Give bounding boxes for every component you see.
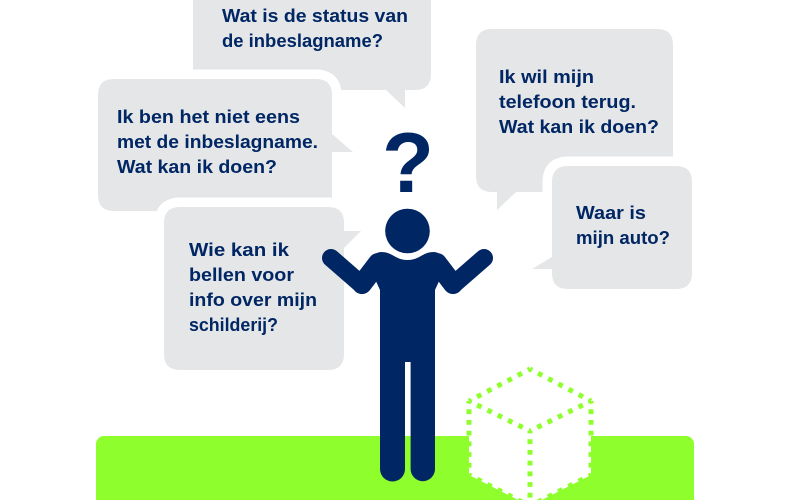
speech bubble: phone back [476, 29, 673, 210]
shoulders [362, 263, 453, 284]
speech bubble: status of the seizure [193, 0, 431, 108]
speech bubble: who to call about painting: bellen voor [189, 264, 294, 285]
speech bubble: who to call about painting [164, 207, 361, 370]
speech bubble: disagree with the seizure: Ik ben het niet eens [117, 106, 300, 127]
speech bubble: who to call about painting: info over mijn [189, 289, 317, 310]
arms [331, 258, 484, 285]
speech bubble: disagree with the seizure: Wat kan ik doen? [117, 156, 277, 177]
head [385, 209, 430, 253]
speech bubble: where is my car [532, 166, 692, 289]
speech bubble: who to call about painting: Wie kan ik [189, 239, 290, 260]
speech bubble: who to call about painting: schilderij? [189, 314, 278, 335]
speech bubble: phone back: Wat kan ik doen? [499, 116, 659, 137]
speech bubble: status of the seizure: de inbeslagname? [222, 30, 383, 51]
speech bubble: disagree with the seizure [98, 79, 353, 211]
question mark: ? [382, 116, 434, 211]
speech bubble: where is my car: mijn auto? [576, 227, 670, 248]
speech bubble: status of the seizure: Wat is de status van [222, 5, 408, 26]
speech bubble: disagree with the seizure: met de inbeslagname. [117, 131, 318, 152]
speech bubble: where is my car: Waar is [576, 202, 646, 223]
dotted cube icon [469, 369, 591, 500]
body and legs [369, 252, 446, 481]
person shrugging [331, 209, 484, 481]
speech bubble: phone back: Ik wil mijn [499, 66, 594, 87]
speech bubble: phone back: telefoon terug. [499, 91, 636, 112]
green ground panel [96, 436, 694, 500]
